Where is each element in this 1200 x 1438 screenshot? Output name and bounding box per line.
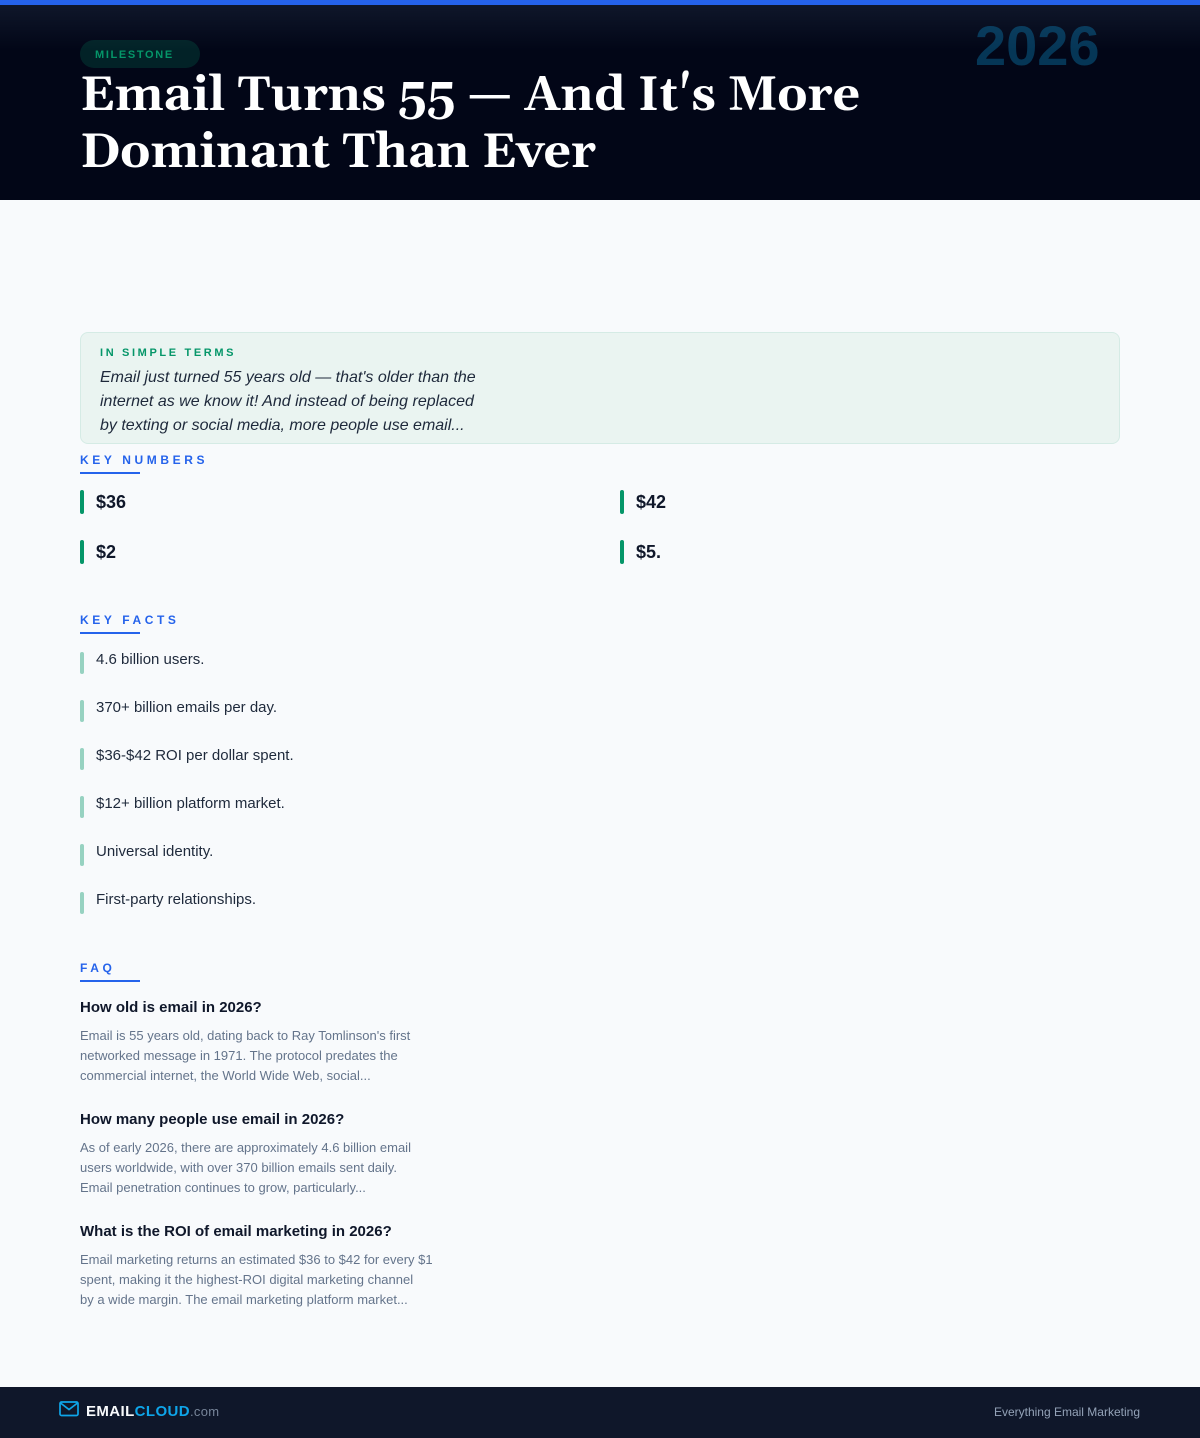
panel label: IN SIMPLE TERMS — [100, 347, 236, 359]
fact: identity — [80, 843, 213, 866]
stat: $5. — [620, 540, 661, 564]
stat: $2: $2 — [96, 542, 116, 562]
category badge — [80, 40, 200, 68]
category badge: MILESTONE — [95, 49, 174, 61]
footer — [0, 1387, 1200, 1438]
faq item: age — [80, 999, 410, 1083]
faq item: users: How many people use email in 2026? — [80, 1111, 344, 1128]
stat: $2 — [80, 540, 116, 564]
faq item: users: Email penetration continues to grow, particularly... — [80, 1180, 366, 1195]
faq item: age: How old is email in 2026? — [80, 999, 262, 1016]
fact: relationships: First-party relationships. — [96, 891, 256, 908]
tagline: Everything Email Marketing — [994, 1405, 1140, 1419]
faq item: age: networked message in 1971. The protocol predates the — [80, 1048, 398, 1063]
faq item: age: Email is 55 years old, dating back to Ray Tomlinson's first — [80, 1028, 410, 1043]
faq item: ROI: spent, making it the highest-ROI digital marketing channel — [80, 1272, 413, 1287]
fact: ROI: $36-$42 ROI per dollar spent. — [96, 747, 294, 764]
panel text — [100, 369, 476, 434]
stat: $42: $42 — [636, 492, 666, 512]
heading: key numbers: KEY NUMBERS — [80, 453, 208, 467]
panel text: Email just turned 55 years old — that's older than the — [100, 369, 476, 386]
faq item: users: users worldwide, with over 370 billion emails sent daily. — [80, 1160, 397, 1175]
faq item: ROI: What is the ROI of email marketing in 2026? — [80, 1223, 392, 1240]
logo wordmark: EMAILCLOUD.com — [86, 1403, 219, 1420]
panel text: by texting or social media, more people use email... — [100, 417, 465, 434]
heading: FAQ: FAQ — [80, 961, 115, 975]
icon: envelope — [59, 1401, 79, 1416]
title: Dominant Than Ever — [80, 123, 596, 184]
panel: in simple terms — [80, 332, 1120, 444]
faq item: users: As of early 2026, there are approximately 4.6 billion email — [80, 1140, 411, 1155]
stat: $42 — [620, 490, 666, 514]
fact: market: $12+ billion platform market. — [96, 795, 285, 812]
stat: $36: $36 — [96, 492, 126, 512]
faq item: users — [80, 1111, 411, 1195]
heading: key facts: KEY FACTS — [80, 613, 180, 627]
fact: users: 4.6 billion users. — [96, 651, 204, 668]
panel text: internet as we know it! And instead of being replaced — [100, 393, 474, 410]
fact: emails per day: 370+ billion emails per day. — [96, 699, 277, 716]
stat: $5.: $5. — [636, 542, 661, 562]
stat: $36 — [80, 490, 126, 514]
faq item: age: commercial internet, the World Wide Web, social... — [80, 1068, 371, 1083]
fact: market — [80, 795, 285, 818]
fact: identity: Universal identity. — [96, 843, 213, 860]
faq item: ROI — [80, 1223, 433, 1307]
faq item: ROI: by a wide margin. The email marketing platform market... — [80, 1292, 408, 1307]
title — [80, 66, 860, 184]
title: Email Turns 55 — And It's More — [80, 66, 860, 127]
fact: ROI — [80, 747, 294, 770]
faq item: ROI: Email marketing returns an estimated $36 to $42 for every $1 — [80, 1252, 433, 1267]
year watermark: 2026 — [975, 14, 1100, 77]
fact: emails per day — [80, 699, 277, 722]
header banner — [0, 0, 1200, 200]
fact: users — [80, 651, 204, 674]
fact: relationships — [80, 891, 256, 914]
top accent bar — [0, 0, 1200, 5]
